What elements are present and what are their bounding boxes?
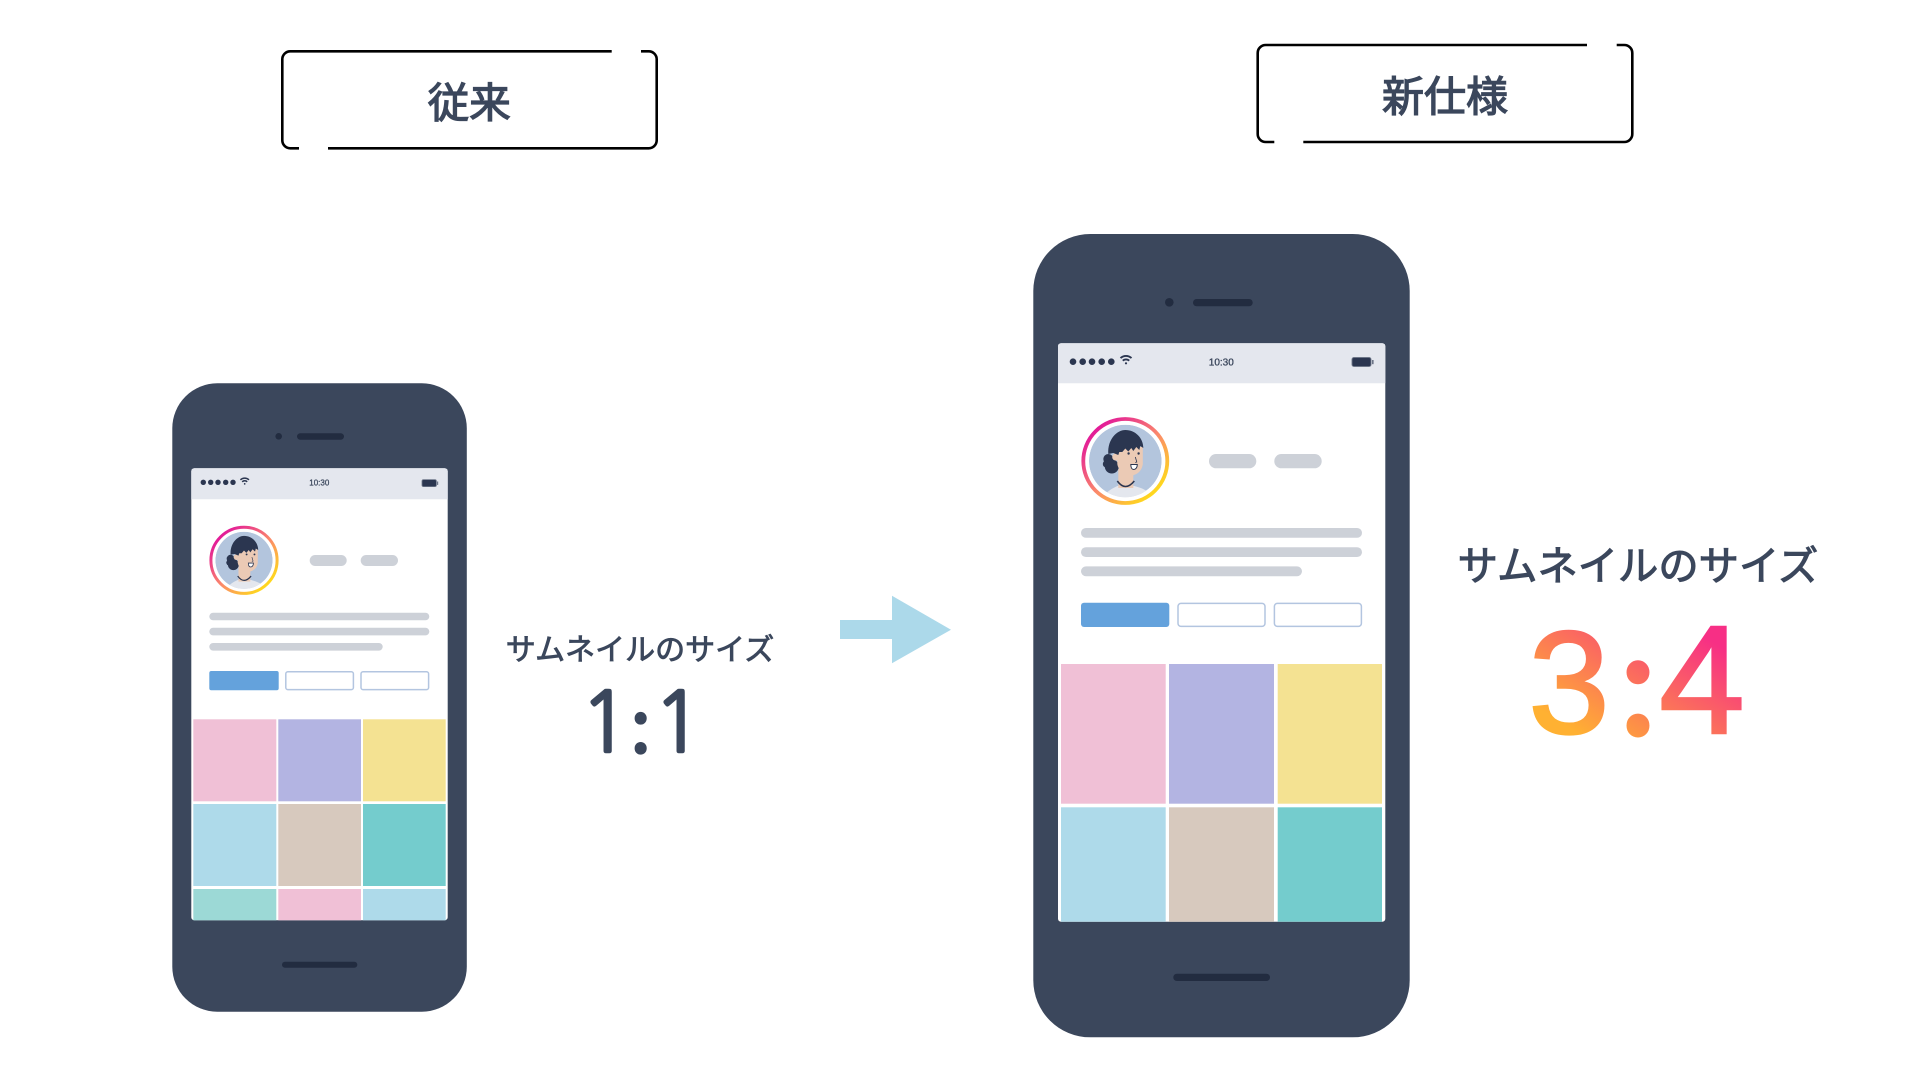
status bar [1058,343,1385,383]
name pills [310,555,398,566]
thumbnail grid 3:4 [1061,664,1382,922]
caption: size 1:1: 1 [580,681,630,764]
label: conventional [282,51,657,148]
caption: size 1:1 [506,625,774,774]
caption: size 1:1: サムネイルのサイズ [506,625,774,669]
buttons [1081,603,1361,627]
caption: size 3:4: サムネイルのサイズ [1458,533,1818,592]
bio lines [1081,528,1362,576]
caption: size 3:4 [1458,533,1818,772]
avatar [1083,419,1167,503]
caption: size 3:4: : [1620,581,1656,772]
arrow [840,596,951,663]
name pills [1209,454,1322,468]
thumbnail grid 1:1 [193,719,446,920]
phone: conventional 1:1 [172,383,467,1012]
caption: size 1:1: 1 [653,681,703,764]
phone: new spec 3:4 [1033,234,1410,1037]
label: new spec [1258,45,1632,142]
status bar: 10:30 [1209,357,1234,368]
label: conventional: 従来 [428,70,511,130]
status bar: 10:30 [309,478,330,487]
caption: size 1:1: : [630,666,651,774]
caption: size 3:4: 4 [1659,594,1745,766]
label: new spec: 新仕様 [1382,64,1508,124]
status bar [191,468,448,499]
bio lines [209,613,429,651]
avatar [211,527,277,593]
buttons [209,671,429,690]
caption: size 3:4: 3 [1528,601,1610,764]
